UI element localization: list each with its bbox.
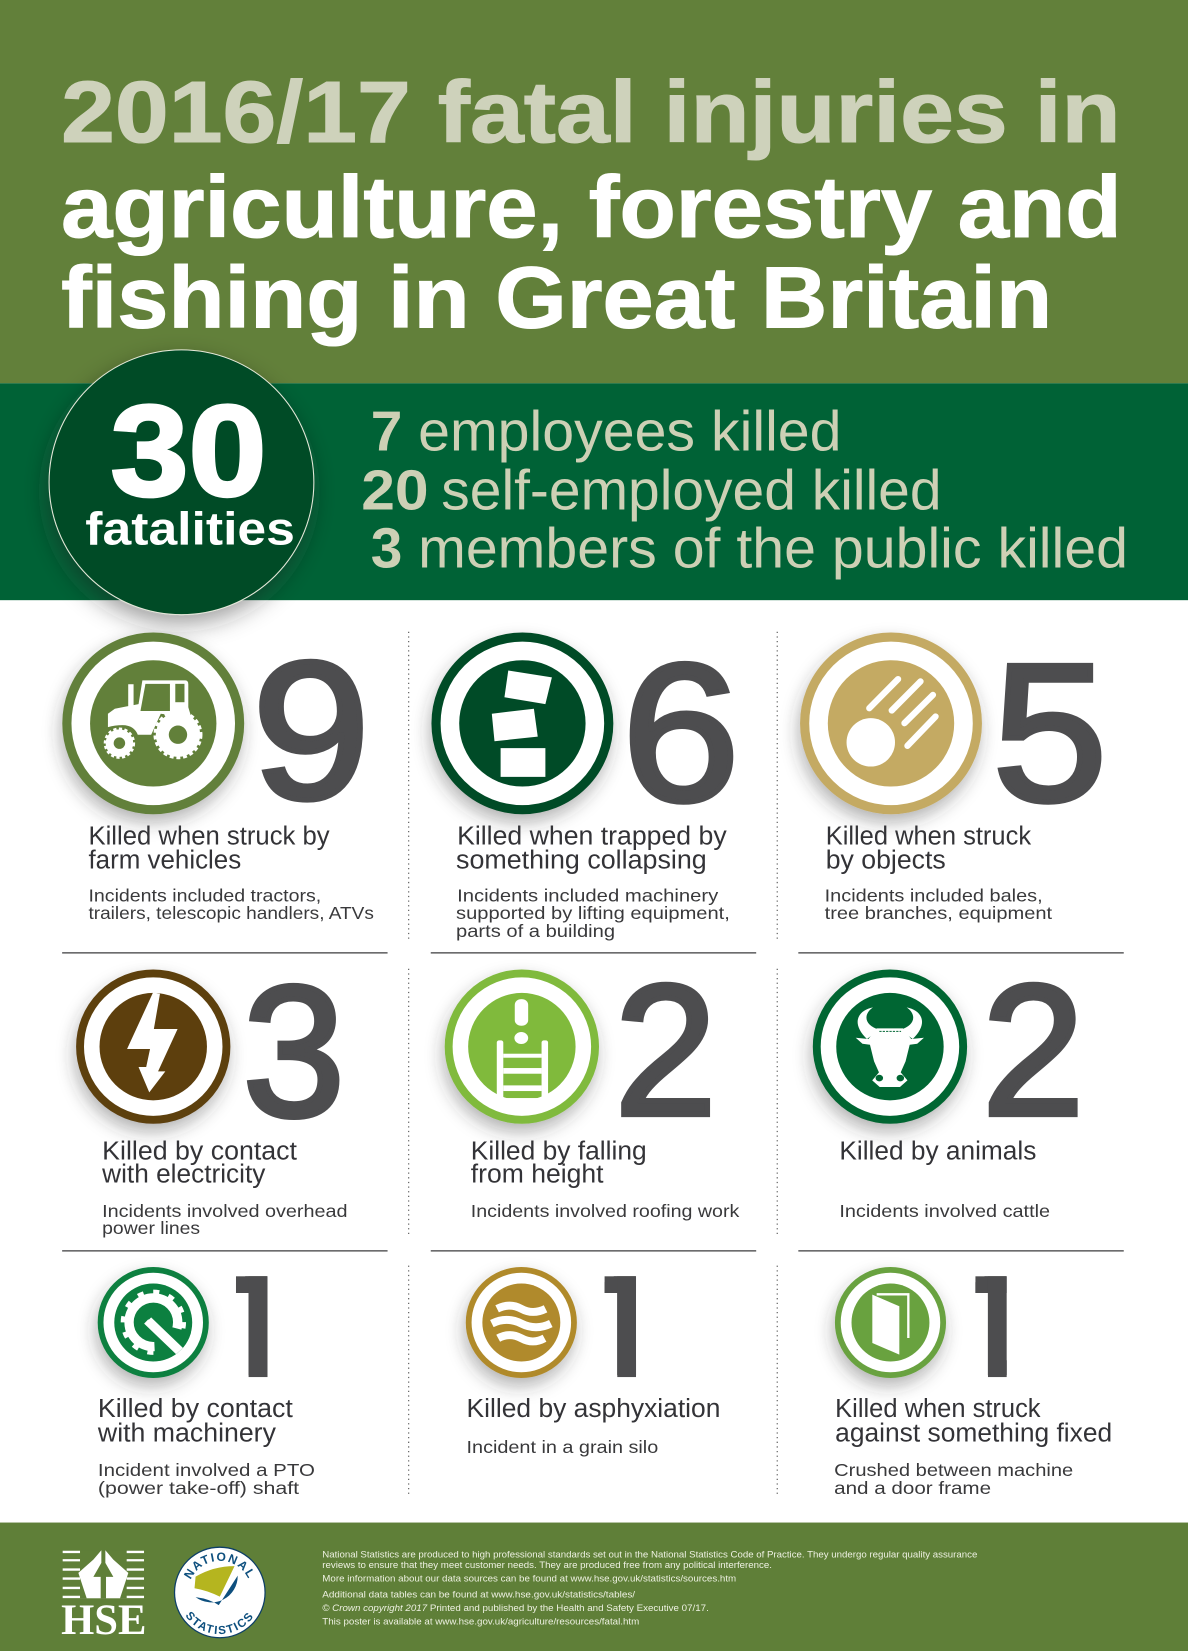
detail: Crushed between machine <box>834 1460 1073 1480</box>
panel: falling from height <box>449 947 739 1221</box>
panel: contact with electricity <box>80 948 348 1238</box>
number 5: 5 <box>993 623 1107 842</box>
detail: parts of a building <box>456 921 615 941</box>
detail: power lines <box>102 1218 200 1238</box>
number 3: 3 <box>243 948 345 1156</box>
panel: killed by animals <box>817 947 1084 1221</box>
breakdown of fatalities <box>361 401 1128 581</box>
heading: something collapsing <box>456 845 707 875</box>
heading: farm vehicles <box>88 845 241 875</box>
National Statistics logo: NATIONAL <box>184 1552 253 1580</box>
detail <box>825 885 1052 923</box>
detail <box>834 1460 1073 1498</box>
title: fishing in Great Britain <box>61 248 1052 346</box>
number 2: 2 <box>982 947 1084 1155</box>
detail: Incidents included tractors, <box>88 885 321 905</box>
number 1: 1 <box>952 1243 1034 1407</box>
footer panel <box>0 1523 1188 1651</box>
detail: Incidents involved cattle <box>839 1201 1050 1221</box>
detail <box>88 885 374 923</box>
heading <box>88 820 330 875</box>
heading: Killed by animals <box>839 1135 1036 1165</box>
footer notes: This poster is available at www.hse.gov.uk/agriculture/resources/fatal.htm <box>322 1617 639 1627</box>
HSE logo <box>61 1550 146 1644</box>
number 1 <box>236 1276 268 1378</box>
detail: tree branches, equipment <box>825 903 1052 923</box>
icon: waves <box>469 1270 574 1375</box>
panel: struck by farm vehicles <box>67 621 374 923</box>
panel: asphyxiation <box>467 1243 720 1457</box>
heading <box>835 1393 1112 1447</box>
detail: Incidents involved roofing work <box>471 1201 739 1221</box>
footer notes: National Statistics are produced to high professional standards set out in the National Statistics Code of Practice. They undergo regular quality assurance <box>322 1549 978 1559</box>
footer notes <box>322 1549 978 1627</box>
detail: supported by lifting equipment, <box>456 903 730 923</box>
detail: Incidents included bales, <box>825 885 1043 905</box>
breakdown of fatalities: 3 <box>371 518 402 581</box>
HSE logo: HSE <box>61 1597 146 1644</box>
header panel <box>0 0 1188 383</box>
detail: (power take-off) shaft <box>98 1478 299 1498</box>
heading: Killed by contact <box>102 1135 298 1165</box>
icon: collapsing blocks <box>436 637 609 810</box>
heading <box>97 1393 293 1447</box>
National Statistics logo: STATISTICS <box>186 1612 252 1634</box>
icon: gear and spanner <box>101 1270 206 1393</box>
heading: Killed by asphyxiation <box>467 1393 720 1423</box>
icon: falling object <box>805 637 977 810</box>
detail: and a door frame <box>834 1478 991 1498</box>
number 1 <box>975 1276 1007 1378</box>
icon: lightning bolt <box>80 973 226 1120</box>
number 2: 2 <box>615 947 717 1155</box>
heading: with electricity <box>101 1158 266 1188</box>
heading <box>471 1135 647 1188</box>
detail: Incident involved a PTO <box>98 1460 315 1480</box>
icon: bull head <box>817 973 963 1120</box>
heading: Killed by falling <box>471 1135 647 1165</box>
heading <box>826 820 1032 875</box>
detail: trailers, telescopic handlers, ATVs <box>88 903 374 923</box>
footer notes: © Crown copyright 2017 Printed and published by the Health and Safety Executive 07/17. <box>322 1603 709 1613</box>
number 6: 6 <box>622 623 740 842</box>
detail: Incident in a grain silo <box>467 1437 658 1457</box>
heading: Killed when struck <box>826 820 1032 850</box>
panel: trapped by something collapsing <box>436 623 740 941</box>
callout: 30 fatalities: fatalities <box>85 502 295 554</box>
panel: struck by objects <box>805 623 1107 923</box>
title <box>61 63 1122 346</box>
heading: with machinery <box>97 1417 277 1447</box>
callout: 30 fatalities <box>49 350 314 615</box>
heading: by objects <box>826 845 946 875</box>
panel: fatalities band <box>0 383 1188 600</box>
panel: struck against something fixed <box>834 1243 1112 1498</box>
number 1: 1 <box>213 1243 294 1407</box>
heading <box>101 1135 298 1188</box>
title: 2016/17 fatal injuries in <box>61 63 1121 161</box>
detail <box>98 1460 315 1498</box>
panel: contact with machinery <box>97 1243 315 1498</box>
National Statistics logo <box>174 1546 266 1638</box>
footer notes: More information about our data sources can be found at www.hse.gov.uk/statistics/sources.htm <box>322 1574 736 1584</box>
heading: Killed when struck <box>835 1393 1041 1423</box>
detail <box>102 1201 348 1238</box>
heading: against something fixed <box>835 1417 1112 1447</box>
number 9: 9 <box>252 621 370 840</box>
breakdown of fatalities: members of the public killed <box>418 518 1128 581</box>
number 1 <box>604 1276 636 1378</box>
breakdown of fatalities: self-employed killed <box>441 460 942 523</box>
icon: tractor <box>67 637 240 810</box>
heading: Killed by contact <box>98 1393 293 1423</box>
detail: Incidents involved overhead <box>102 1201 348 1221</box>
detail <box>456 885 730 941</box>
breakdown of fatalities: employees killed <box>418 401 841 464</box>
detail: Incidents included machinery <box>457 885 718 905</box>
title: agriculture, forestry and <box>61 158 1122 256</box>
number 1: 1 <box>581 1243 663 1407</box>
icon: ladder with warning <box>449 973 595 1120</box>
footer notes: Additional data tables can be found at www.hse.gov.uk/statistics/tables/ <box>322 1589 636 1599</box>
heading: from height <box>471 1158 604 1188</box>
icon: door <box>838 1270 943 1375</box>
breakdown of fatalities: 20 <box>361 460 429 523</box>
breakdown of fatalities: 7 <box>371 401 402 464</box>
heading: Killed when struck by <box>88 820 330 850</box>
callout: 30 fatalities: 30 <box>111 379 266 523</box>
heading: Killed when trapped by <box>457 820 728 850</box>
heading <box>456 820 728 875</box>
footer notes: reviews to ensure that they meet customer needs. They are produced free from any political interference. <box>322 1560 772 1570</box>
